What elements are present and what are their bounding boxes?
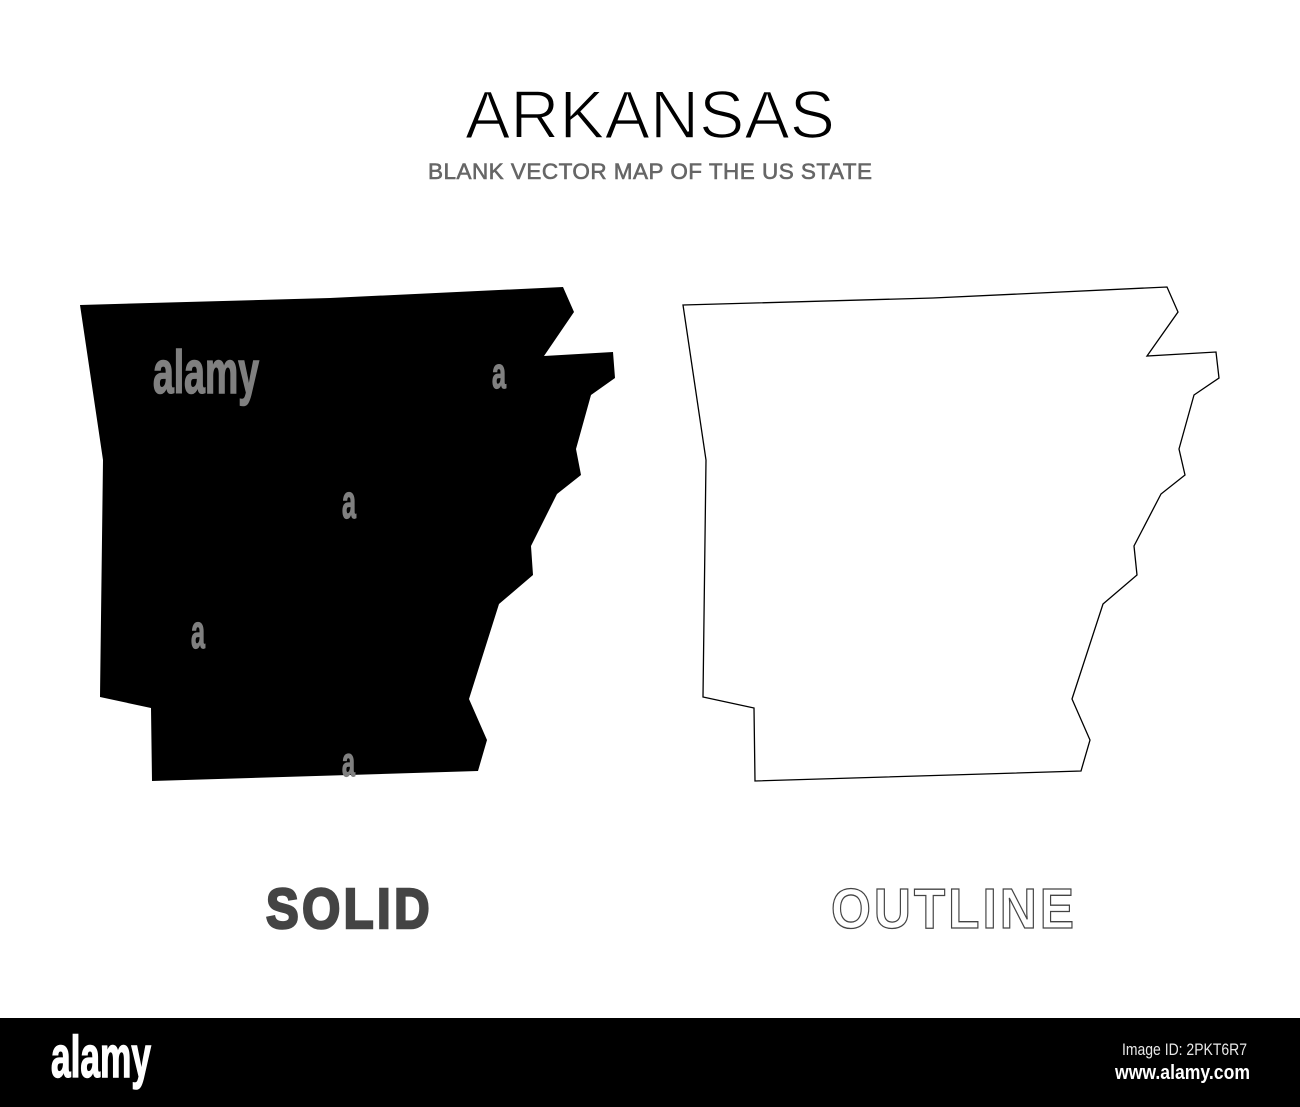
footer image id: Image ID: 2PKT6R7 xyxy=(1122,1040,1247,1059)
map: outline Arkansas xyxy=(683,287,1219,781)
footer website: www.alamy.com xyxy=(1114,1062,1250,1084)
footer logo: alamy: alamy xyxy=(51,1025,151,1090)
watermark: letter a, upper right: a xyxy=(492,349,506,398)
label: solid: SOLID xyxy=(266,878,433,941)
footer bar xyxy=(0,1018,1300,1107)
watermark: letter a, centre: a xyxy=(342,475,356,528)
map: solid Arkansas xyxy=(80,287,615,781)
watermark: alamy logo: alamy xyxy=(153,339,259,406)
watermark: letter a, bottom: a xyxy=(342,739,356,785)
watermark: letter a, lower left: a xyxy=(191,605,205,658)
title: ARKANSAS xyxy=(465,77,835,153)
solid state map with watermarks xyxy=(80,287,615,785)
subtitle: BLANK VECTOR MAP OF THE US STATE xyxy=(428,159,872,184)
label: outline: OUTLINE xyxy=(831,878,1077,941)
footer background xyxy=(0,1018,1300,1107)
